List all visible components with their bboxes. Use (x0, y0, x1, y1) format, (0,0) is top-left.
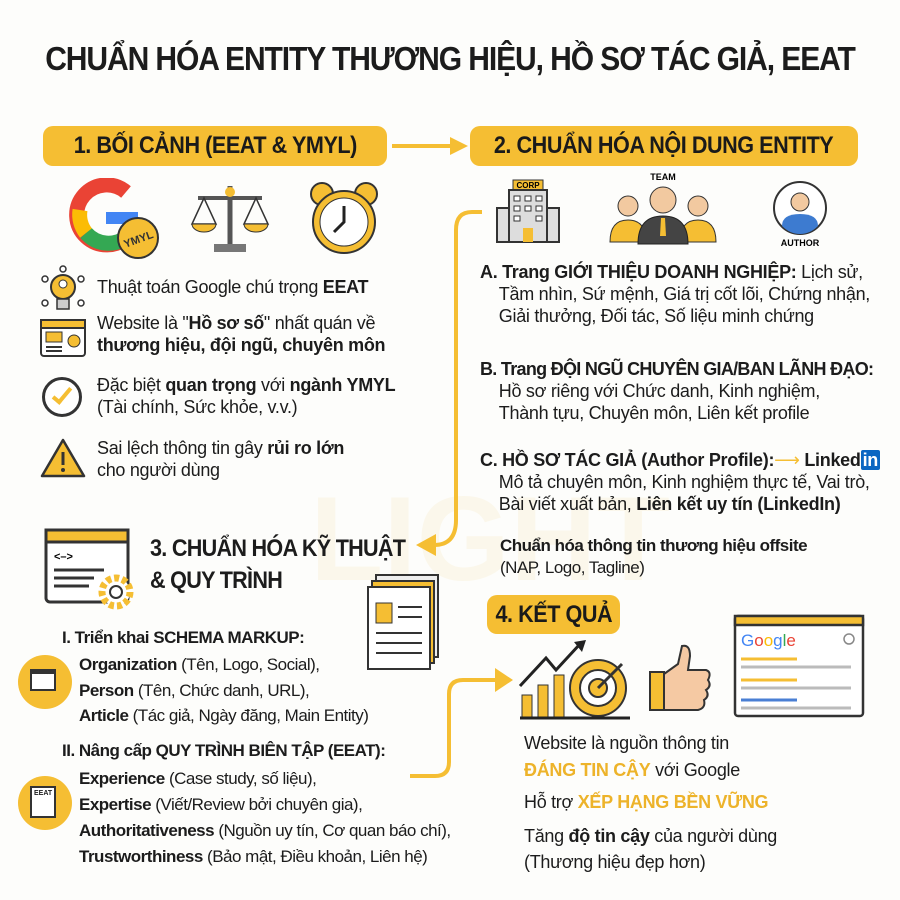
process items: Trustworthiness (Bảo mật, Điều khoản, Liên hệ) (79, 847, 427, 866)
text: website: thương hiệu, đội ngũ, chuyên môn (97, 335, 385, 355)
schema items (79, 655, 368, 725)
process heading: II. Nâng cấp QUY TRÌNH BIÊN TẬP (EEAT): (62, 741, 385, 760)
icon: growth target (519, 640, 630, 720)
text block B: Thành tựu, Chuyên môn, Liên kết profile (499, 403, 809, 423)
icon: documents (367, 574, 439, 670)
heading 2: 2. CHUẨN HÓA NỘI DUNG ENTITY (494, 132, 834, 159)
icon: code window (44, 528, 134, 610)
text block A: Giải thưởng, Đối tác, Số liệu minh chứng (499, 306, 814, 326)
icon: check clock (42, 377, 82, 417)
heading 4: 4. KẾT QUẢ (495, 600, 612, 628)
text block C: Mô tả chuyên môn, Kinh nghiệm thực tế, Vai trò, (499, 472, 870, 492)
icon: idea (41, 265, 85, 310)
icon: website (40, 319, 86, 357)
heading 1 (43, 126, 387, 166)
icon: thumbs up (649, 644, 711, 711)
text offsite (500, 536, 807, 577)
result 2: Hỗ trợ XẾP HẠNG BỀN VỮNG (524, 792, 768, 812)
text: eeat: Thuật toán Google chú trọng EEAT (97, 277, 368, 297)
schema block (18, 628, 368, 725)
heading 2 (470, 126, 858, 166)
icon: code window: <–> (54, 551, 73, 563)
process items: Expertise (Viết/Review bởi chuyên gia), (79, 795, 362, 814)
connector arrow 3 to 4 (410, 668, 513, 778)
icon: eeat doc circle: EEAT (34, 790, 52, 797)
text block B (480, 358, 873, 423)
heading 1: 1. BỐI CẢNH (EEAT & YMYL) (73, 132, 357, 159)
watermark logo: LIGHT (310, 472, 670, 606)
icon: google search browser: Google (741, 631, 796, 650)
text: ymyl (97, 375, 396, 417)
result 3: Tăng độ tin cậy của người dùng (524, 826, 777, 846)
text: website (97, 313, 385, 355)
icon: author (773, 181, 827, 248)
text: risk: cho người dùng (97, 460, 220, 480)
text block A (480, 261, 870, 326)
text block C: Bài viết xuất bản, Liên kết uy tín (LinkedIn) (499, 494, 840, 514)
text block A: A. Trang GIỚI THIỆU DOANH NGHIỆP: Lịch sử, (480, 262, 863, 282)
result 1: Website là nguồn thông tin (524, 733, 729, 753)
icon: warning (40, 438, 86, 478)
heading 3: 3. CHUẨN HÓA KỸ THUẬT (150, 535, 405, 562)
icon: author: AUTHOR (781, 238, 820, 248)
result 3: (Thương hiệu đẹp hơn) (524, 852, 705, 872)
text: risk: Sai lệch thông tin gây rủi ro lớn (97, 438, 344, 458)
icon: scale (190, 186, 270, 252)
icon: google ymyl: YMYL (122, 229, 155, 251)
schema items: Article (Tác giả, Ngày đăng, Main Entity) (79, 706, 368, 725)
process items: Authoritativeness (Nguồn uy tín, Cơ quan báo chí), (79, 821, 451, 840)
eeat process block (18, 741, 451, 866)
icon: google search browser (734, 614, 864, 718)
schema items: Organization (Tên, Logo, Social), (79, 655, 319, 674)
text offsite: Chuẩn hóa thông tin thương hiệu offsite (500, 536, 807, 555)
icon: google ymyl (69, 178, 159, 259)
heading 3: & QUY TRÌNH (150, 567, 282, 594)
text: ymyl: (Tài chính, Sức khỏe, v.v.) (97, 397, 297, 417)
text block C (480, 449, 880, 514)
connector arrow 2 to 3 (416, 210, 482, 556)
text block A: Tầm nhìn, Sứ mệnh, Giá trị cốt lõi, Chứng nhận, (499, 284, 870, 304)
arrow 1 to 2 (392, 137, 468, 155)
result 1 (524, 733, 740, 780)
heading 4 (487, 595, 620, 634)
icon: eeat doc circle (18, 776, 72, 830)
text block B: Hồ sơ riêng với Chức danh, Kinh nghiệm, (499, 381, 820, 401)
icon: building (496, 180, 560, 243)
result 1: ĐÁNG TIN CẬY với Google (524, 760, 740, 780)
icon: schema circle (18, 655, 72, 709)
text: ymyl: Đặc biệt quan trọng với ngành YMYL (97, 375, 395, 395)
text block B: B. Trang ĐỘI NGŨ CHUYÊN GIA/BAN LÃNH ĐẠO: (480, 359, 873, 379)
title: CHUẨN HÓA ENTITY THƯƠNG HIỆU, HỒ SƠ TÁC GIẢ, EEAT (45, 40, 855, 77)
schema items: Person (Tên, Chức danh, URL), (79, 680, 309, 700)
results text (524, 733, 777, 872)
process items (79, 769, 451, 866)
schema heading: I. Triển khai SCHEMA MARKUP: (62, 628, 304, 647)
text offsite: (NAP, Logo, Tagline) (500, 558, 644, 577)
icon: team (610, 172, 716, 244)
icon: team: TEAM (650, 172, 676, 182)
result 3 (524, 826, 777, 872)
text: website: Website là "Hồ sơ số" nhất quán về (97, 313, 375, 333)
icon: building: CORP (516, 181, 540, 190)
process items: Experience (Case study, số liệu), (79, 769, 316, 788)
bullet list: context (40, 265, 396, 480)
text block C: C. HỒ SƠ TÁC GIẢ (Author Profile):⟶ Linkedin (480, 450, 878, 470)
text: risk (97, 438, 344, 480)
heading 3 (150, 534, 406, 594)
icon: alarm clock (310, 182, 378, 254)
